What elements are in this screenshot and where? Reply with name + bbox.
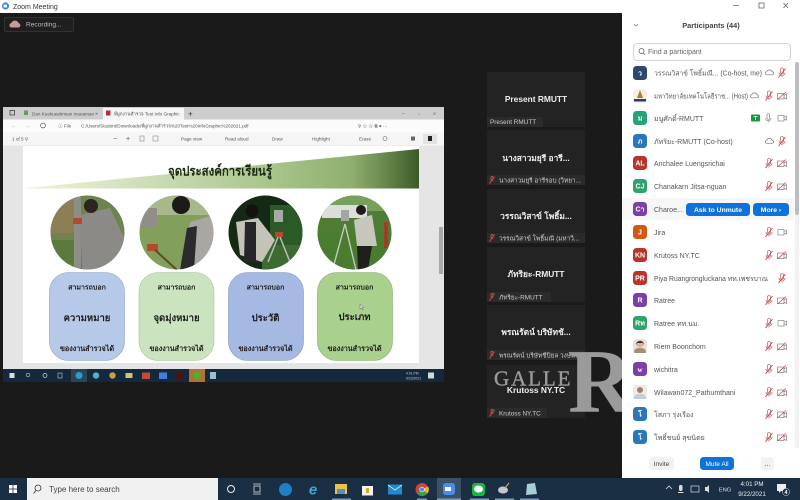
window title bar: Zoom Meeting [13, 4, 58, 11]
participant: Ratree ทท.นม. [633, 316, 786, 330]
more button [753, 203, 789, 216]
card: ความหมาย: ของงานสำรวจได้ [60, 344, 114, 353]
card: จุดมุ่งหมาย: สามารถบอก [158, 284, 195, 292]
card: ประวัติ: ประวัติ [252, 312, 279, 324]
browser tab bar: + [188, 110, 193, 118]
participant: Ratree: R [637, 298, 643, 304]
participant: Jira [633, 225, 786, 239]
scrollbar [795, 62, 799, 448]
pdf toolbar: Page view [181, 136, 203, 142]
watermark: GALLERY: R [568, 331, 635, 432]
participant: โสภา: โสภา รุ่งเรือง [654, 410, 693, 419]
video tile: วรรณวิสาข์: วรรณวิสาข์ โพธิ์มณี (มหาวิ... [499, 234, 579, 242]
card: ประเภท: สามารถบอก [336, 284, 373, 292]
mute all button: Mute All [705, 461, 729, 468]
address bar [3, 120, 444, 132]
participant: Anchalee: AL [635, 160, 645, 168]
pdf toolbar: − [113, 136, 117, 143]
browser tab bar [3, 107, 444, 120]
taskbar app underlines [332, 498, 539, 500]
video tile: นางสาวมยุรี: นางสาวมยุรี อารีรอบ (วิทยา... [499, 176, 581, 184]
address bar: ⚲ ☆ ☆ ⧉ ● ··· [358, 122, 388, 130]
more button: More › [761, 207, 781, 214]
pdf toolbar: Highlight [312, 136, 331, 142]
watermark: GALLERY [494, 331, 635, 432]
video tile: วรรณวิสาข์ [487, 189, 585, 243]
participant: Jira: J [638, 230, 642, 236]
participant: วรรณวิสาข์: ว [638, 70, 642, 78]
participant: Ratree ทท.นม.: Rท [635, 320, 645, 328]
recording indicator: Recording... [26, 22, 62, 29]
participant: Anchalee [633, 156, 786, 170]
card: ประเภท: ของงานสำรวจได้ [327, 344, 382, 353]
cortana [228, 486, 234, 492]
video tile: ภัทริยะ: ภัทริยะ-RMUTT [507, 269, 565, 279]
participant: มนูศักดิ์: มนูศักดิ์-RMUTT [654, 113, 704, 123]
pdf toolbar: Read aloud [225, 136, 249, 142]
edge icon [279, 483, 292, 496]
video tile: Krutoss NY.TC: Krutoss NY.TC [499, 410, 541, 418]
address bar: → [25, 124, 31, 130]
search box: Type here to search [49, 485, 120, 494]
video tile: Present RMUTT: Present RMUTT [490, 119, 536, 126]
card: จุดมุ่งหมาย: ของงานสำรวจได้ [149, 344, 204, 353]
store icon [362, 486, 373, 496]
pdf toolbar: 1 of 5 ⚲ [12, 136, 29, 142]
system tray: 9/22/2021 [738, 491, 766, 498]
slide heading: จุดประสงค์การเรียนรู้ [168, 162, 273, 180]
card: ความหมาย [50, 272, 124, 360]
more options button [761, 457, 774, 470]
photo 3: surveyor in dark greenery [228, 195, 303, 270]
participant: มนูศักดิ์ [633, 111, 786, 125]
mute all button [700, 457, 734, 470]
card: ความหมาย: ความหมาย [64, 313, 110, 324]
participant: มหาวิทยาลัย host: มหาวิทยาลัยเทคโนโลยีราช... (Host) [654, 92, 748, 100]
pdf toolbar [3, 132, 444, 146]
video tile: Present RMUTT [487, 72, 585, 127]
participants panel [622, 0, 800, 478]
participant: Piya [633, 271, 786, 285]
participant: โพธิ์ชนย์: โ [637, 432, 642, 442]
window controls [733, 3, 788, 8]
photo 1: surveyor from behind [50, 195, 125, 270]
participant: ภัทริยะ: ภ [638, 138, 643, 146]
shared screen taskbar: 9/22/2021 [406, 376, 421, 380]
participant: Krutoss: Krutoss NY.TC [654, 253, 700, 260]
mouse cursor [360, 304, 364, 310]
participant: Chanakarn [633, 179, 786, 193]
participant: wichitra: wichitra [653, 367, 678, 374]
participant: วรรณวิสาข์: วรรณวิสาข์ โพธิ์มณี... (Co-host, me) [654, 68, 762, 78]
tile name over watermark: Krutoss NY.TC [507, 385, 565, 395]
participant: Charoe (hover row) [622, 198, 794, 220]
start button [9, 485, 17, 493]
participant: มนูศักดิ์: ม [638, 116, 643, 122]
card: จุดมุ่งหมาย: จุดมุ่งหมาย [153, 313, 200, 324]
more options button: ... [765, 461, 770, 468]
participant: wichitra: w [637, 366, 643, 374]
participant: Riem [633, 339, 786, 353]
video tile: พรณรัตน์ [487, 305, 585, 360]
participant: ภัทริยะ: ภัทริยะ-RMUTT (Co-host) [654, 138, 733, 146]
pdf page [23, 146, 419, 363]
search box [634, 44, 790, 60]
participant: Riem: Riem Boonchom [654, 344, 706, 351]
participant: Ratree [633, 293, 786, 307]
card: ประวัติ: ของงานสำรวจได้ [238, 344, 293, 353]
recording indicator [4, 18, 74, 32]
participant: โพธิ์ชนย์ [633, 430, 786, 444]
video tile: ภัทริยะ [487, 247, 585, 302]
address bar: C:/Users/Student/Downloads/ที่ผูกงานสำรวจ%20Test%20InfoGraphic%202021.pdf [81, 122, 249, 130]
video tile: นางสาวมยุรี [487, 130, 585, 185]
shared screen taskbar: 4:01 PM [406, 372, 419, 376]
participant: โสภา: โ [637, 410, 642, 418]
notification badge: 4 [784, 490, 788, 496]
participant: วรรณวิสาข์ [633, 66, 786, 80]
browser tab bar: ▫ [418, 112, 420, 118]
participant: Wilawan: Wilawan072_Pathumthani [654, 390, 736, 397]
ask to unmute button [686, 203, 750, 216]
participant: Piya: Piya Ruangrongluckana ทท.เพชรบาณ [654, 276, 768, 283]
file explorer icon [335, 484, 347, 494]
participant: ภัทริยะ [633, 134, 786, 148]
notes icon [526, 483, 537, 495]
internet explorer icon: e [309, 482, 317, 498]
participant: Anchalee: Anchalee Luengsrichai [654, 161, 725, 168]
participant: wichitra [633, 362, 786, 376]
browser tab bar: − [402, 112, 405, 118]
card: ประวัติ: สามารถบอก [247, 284, 284, 292]
system tray: ENG [719, 488, 732, 494]
video tile: Krutoss NY.TC [487, 365, 585, 418]
paint icon [498, 483, 509, 494]
participant: Krutoss [633, 248, 786, 262]
system tray: 4:01 PM [740, 481, 764, 488]
photo 4: surveyor in field [317, 195, 392, 270]
title banner [23, 149, 419, 188]
mail icon [388, 484, 402, 494]
participant: Piya: PR [635, 276, 645, 282]
participant: Charoe (hover row): Charoe... [654, 207, 683, 214]
participant: Ratree ทท.นม.: Ratree ทท.นม. [654, 321, 700, 328]
participant: Chanakarn: Chanakarn Jitsa-nguan [654, 184, 726, 191]
card: ความหมาย: สามารถบอก [68, 284, 106, 292]
card: ประเภท: ประเภท [338, 311, 371, 323]
participant: Ratree: Ratree [654, 298, 675, 305]
window title bar [0, 0, 622, 13]
shared screen taskbar [3, 369, 444, 382]
line icon [472, 483, 485, 496]
address bar: ⓘ File [58, 122, 72, 130]
system tray [666, 481, 766, 498]
video tile: นางสาวมยุรี: นางสาวมยุรี อารี... [502, 153, 570, 164]
address bar: ← [11, 124, 17, 130]
participant: Krutoss: KN [635, 252, 645, 260]
pdf toolbar: Draw [272, 136, 283, 142]
participant: Charoe (hover row): Cา [636, 206, 645, 214]
scrollbar [439, 227, 443, 274]
browser tab bar: ที่ผูกงานสำรวจ Test Info Graphic [114, 110, 180, 118]
browser tab bar: × [95, 112, 98, 118]
shared screen window [3, 107, 444, 382]
windows taskbar [0, 478, 800, 500]
panel heading [634, 21, 740, 30]
browser tab bar: Dan Kuekuealmnan mueaman [32, 112, 94, 116]
video tile: ภัทริยะ: ภัทริยะ-RMUTT [499, 294, 543, 302]
participant: Jira: Jira [654, 230, 665, 237]
invite button: Invite [654, 461, 670, 468]
chrome icon [416, 483, 429, 496]
invite button [649, 457, 674, 470]
participant: Wilawan [633, 385, 786, 399]
video tile: Present RMUTT: Present RMUTT [505, 94, 568, 104]
pdf toolbar: + [126, 136, 130, 143]
photo 2: surveyor at tripod [139, 195, 214, 270]
participant: Chanakarn: CJ [636, 184, 645, 190]
video tile: พรณรัตน์: พรณรัตน์ บริษัทชีปิยล วงษ์มณี [499, 352, 581, 360]
participant: มหาวิทยาลัย host [633, 89, 786, 103]
watermark: GALLERY: GALLE [494, 366, 572, 390]
zoom icon (active) [437, 478, 461, 500]
card: จุดมุ่งหมาย [139, 272, 214, 360]
card: ประวัติ [228, 272, 304, 360]
ask to unmute button: Ask to Unmute [694, 207, 742, 214]
search box: Find a participant [648, 49, 702, 56]
notification badge [777, 484, 790, 496]
search box [27, 478, 218, 500]
video tile: พรณรัตน์: พรณรัตน์ บริษัทชั... [501, 327, 571, 337]
panel heading: Participants (44) [682, 21, 740, 30]
card: ประเภท [318, 272, 392, 360]
participant: โสภา [633, 407, 786, 421]
pdf toolbar: Erase [359, 136, 371, 142]
video tile: วรรณวิสาข์: วรรณวิสาข์ โพธิ์ม... [500, 209, 572, 221]
task view [253, 484, 261, 494]
browser tab bar: × [433, 112, 436, 118]
participant: โพธิ์ชนย์: โพธิ์ชนย์ สุขนิตย [654, 432, 705, 442]
